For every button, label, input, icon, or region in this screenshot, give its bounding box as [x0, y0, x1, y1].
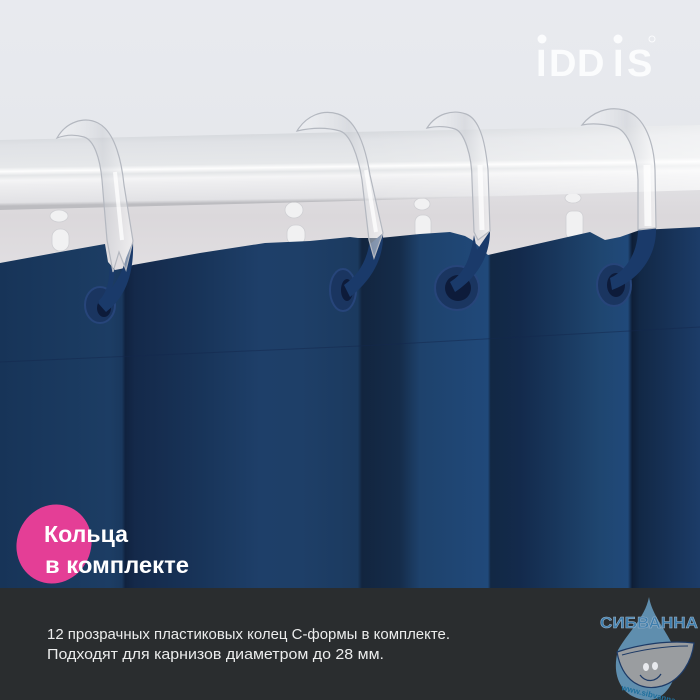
heading: Кольца — [44, 521, 128, 547]
pink blob — [4, 492, 104, 596]
IDDIS logo: IDDIS — [536, 43, 652, 85]
ring 4 — [582, 109, 656, 306]
ring 2 — [297, 112, 383, 311]
description text: 12 прозрачных пластиковых колец С-формы в комплекте. — [47, 626, 450, 643]
heading — [44, 521, 189, 578]
Sibvanna watermark logo: СИБВАННА — [600, 615, 698, 632]
background wall — [0, 0, 700, 300]
ring 3 — [427, 112, 490, 310]
Sibvanna watermark logo — [600, 597, 698, 700]
description text: Подходят для карнизов диаметром до 28 мм. — [47, 646, 384, 663]
description text — [47, 626, 450, 663]
heading: в комплекте — [45, 552, 189, 578]
curtain — [0, 227, 700, 590]
curtain rod — [0, 125, 700, 210]
ring 1 — [57, 120, 133, 323]
ring reflections under the rod — [50, 193, 583, 251]
bottom panel — [0, 588, 700, 700]
